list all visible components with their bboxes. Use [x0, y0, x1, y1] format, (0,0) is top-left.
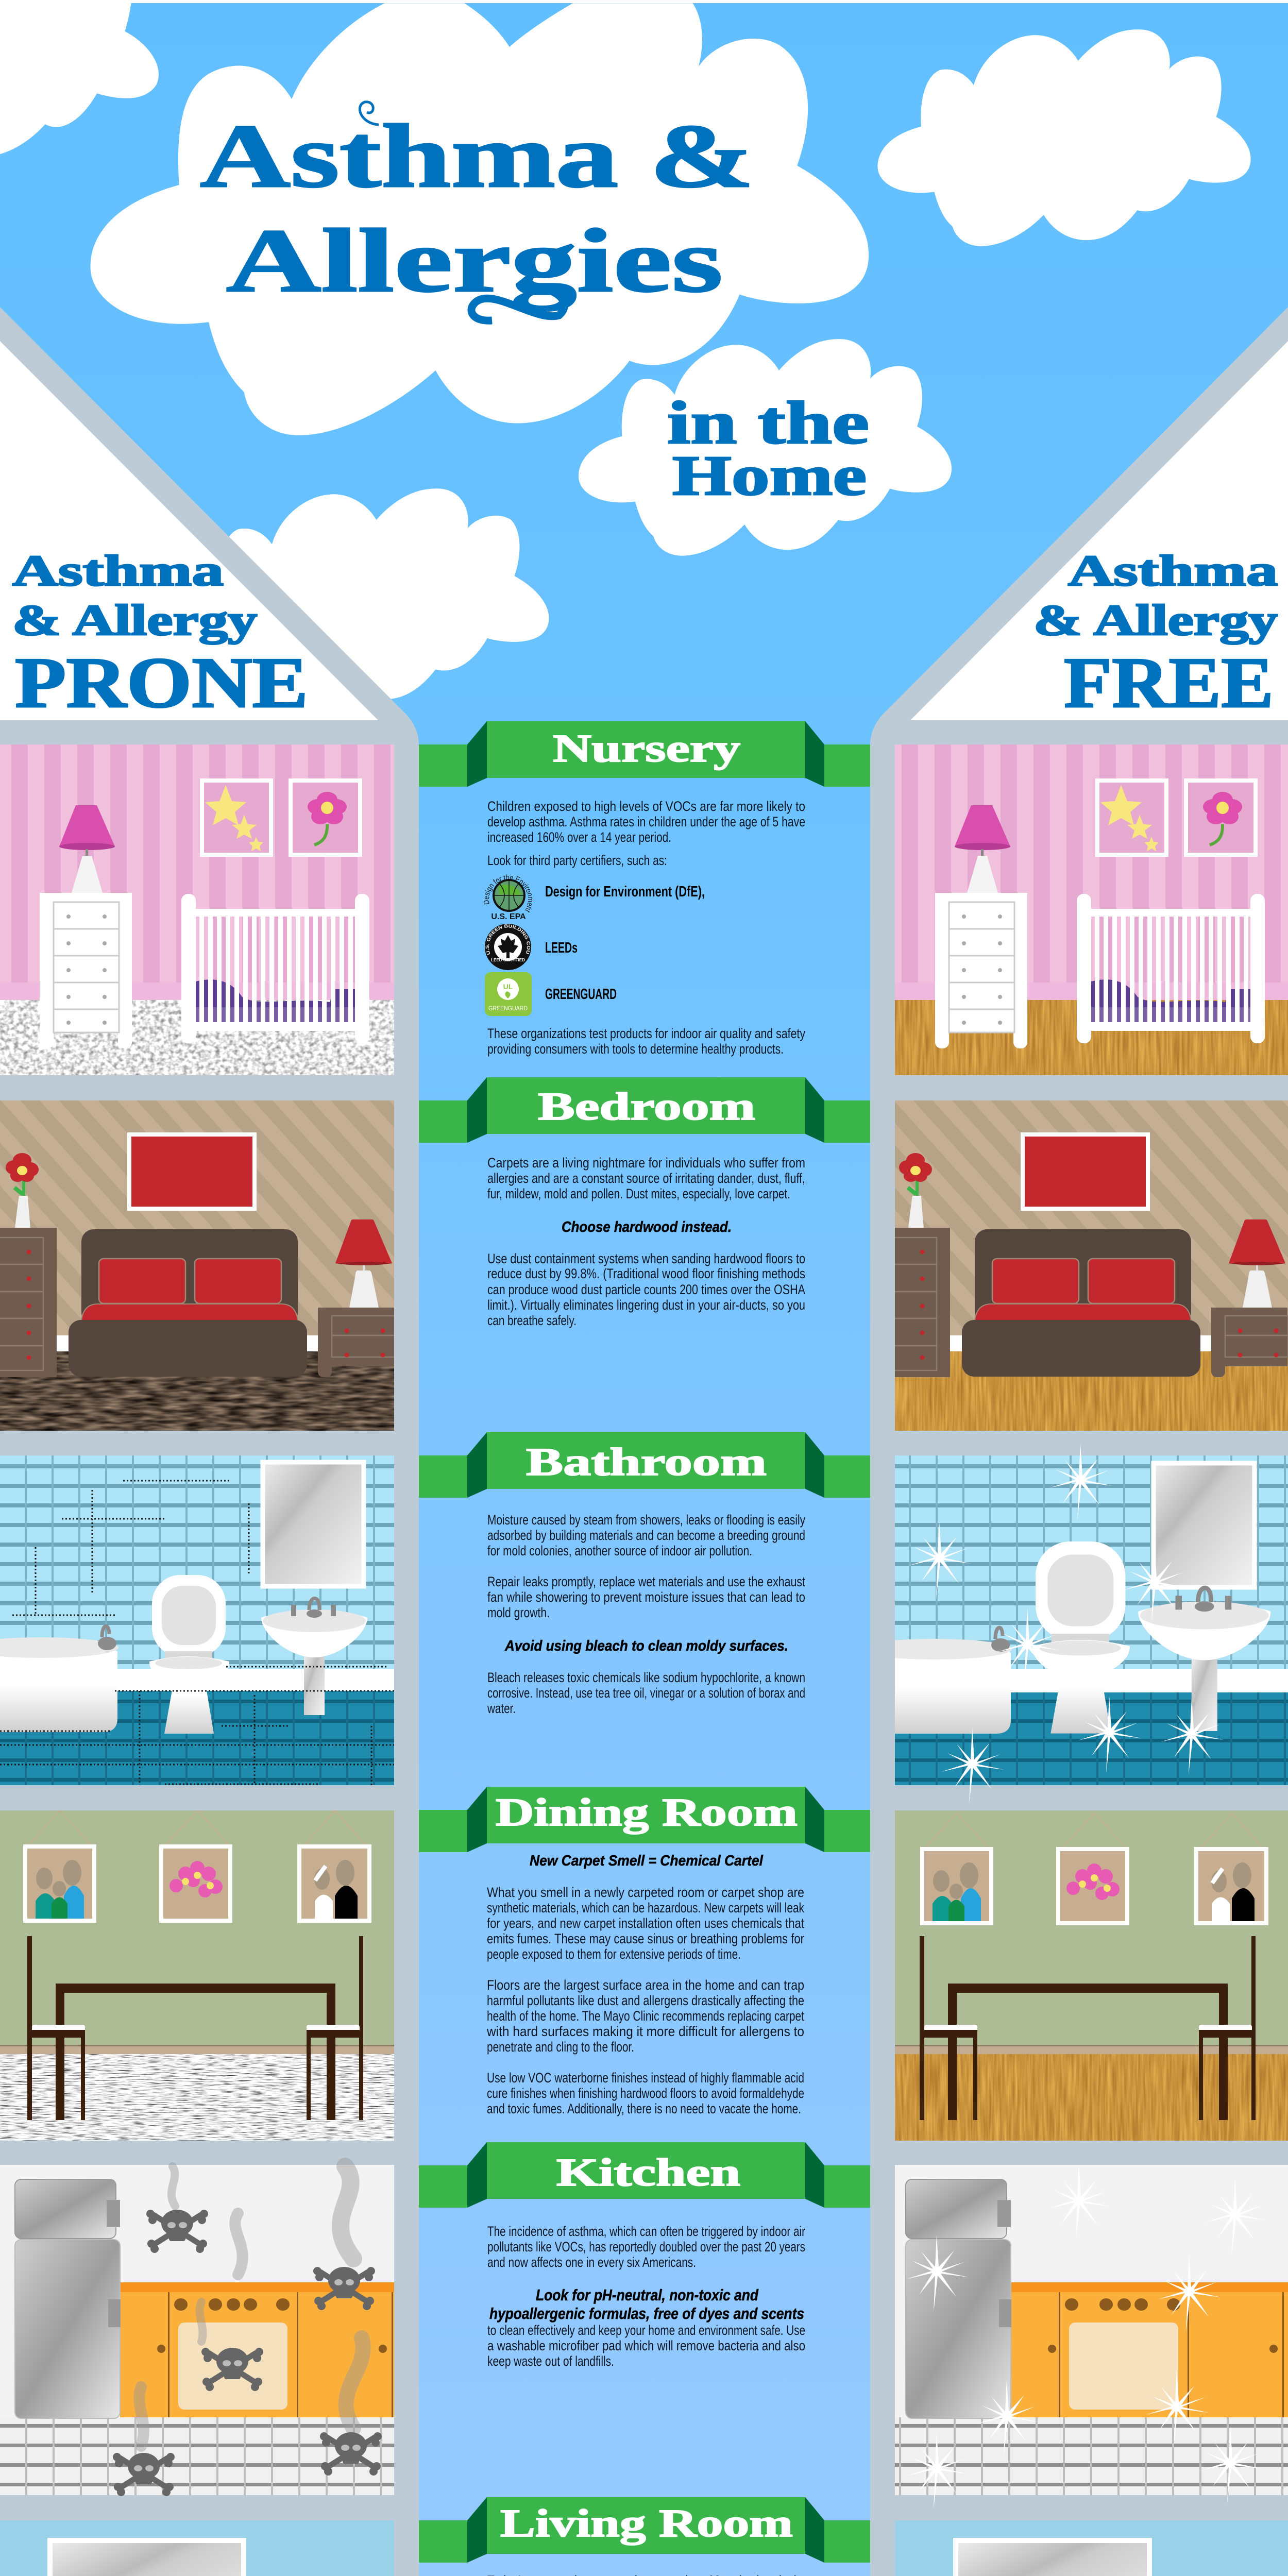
room: dining free: [895, 1810, 1288, 2141]
bathroom text: [487, 1512, 805, 1620]
label: asthma and allergy prone: [12, 547, 308, 723]
bleach text: corrosive. Instead, use tea tree oil, vinegar or a solution of borax and: [487, 1685, 805, 1701]
nursery intro text: [487, 799, 805, 868]
mold specks: [0, 1481, 394, 1785]
section: bedroom: [419, 1077, 870, 1328]
room: nursery free: [895, 744, 1288, 1075]
dining text: harmful pollutants like dust and allergens drastically affecting the: [487, 1993, 804, 2008]
bathroom text: adsorbed by building materials and can become a breeding ground: [487, 1528, 805, 1543]
logo: design for the environment: U.S. EPA: [491, 912, 526, 921]
dining text: Floors are the largest surface area in the home and can trap: [487, 1977, 804, 1993]
room: bathroom prone: [0, 1455, 394, 1785]
nursery closing text: providing consumers with tools to determine healthy products.: [487, 1041, 784, 1057]
room: living free: [895, 2520, 1288, 2576]
callout: new carpet smell: New Carpet Smell = Chemical Cartel: [530, 1853, 764, 1869]
kitchen closing text: a washable microfiber pad which will remove bacteria and also: [487, 2338, 805, 2353]
heading: bedroom: Bedroom: [538, 1085, 755, 1128]
bathroom text: fan while showering to prevent moisture issues that can lead to: [487, 1589, 805, 1605]
room: kitchen prone: [0, 2165, 429, 2496]
house walls and roof left: [0, 307, 419, 2576]
section: dining room: [419, 1787, 870, 2116]
bleach text: [487, 1670, 805, 1716]
section: nursery: [419, 721, 870, 1057]
logo: greenguard: UL: [503, 982, 513, 991]
room: dining prone: [0, 1810, 394, 2141]
callout: look for ph-neutral: Look for pH-neutral, non-toxic and: [536, 2286, 759, 2304]
dining text: Use low VOC waterborne finishes instead of highly flammable acid: [487, 2070, 804, 2086]
heading: kitchen: Kitchen: [556, 2151, 740, 2194]
callout: choose hardwood: Choose hardwood instead.: [562, 1219, 732, 1235]
logo: leed: LEED CERTIFIED: [491, 958, 525, 962]
kitchen text: The incidence of asthma, which can often be triggered by indoor air: [487, 2224, 805, 2239]
nursery closing text: [487, 1026, 805, 1057]
room: kitchen free: [895, 2164, 1288, 2509]
section: kitchen: [419, 2142, 870, 2369]
title: in the: [667, 389, 869, 456]
dining text: cure finishes when finishing hardwood floors to avoid formaldehyde: [487, 2086, 804, 2101]
bedroom dust text: can breathe safely.: [487, 1313, 577, 1328]
bedroom text: Carpets are a living nightmare for individuals who suffer from: [487, 1155, 805, 1171]
room: bedroom free: [888, 1100, 1288, 1431]
logo: leed: U.S. GREEN BUILDING COUNCIL: [485, 924, 531, 955]
title: Home: [672, 444, 867, 507]
label: asthma and allergy free: FREE: [1064, 643, 1274, 723]
label: asthma and allergy prone: Asthma: [12, 547, 224, 595]
label: asthma and allergy prone: & Allergy: [12, 596, 257, 645]
bathroom text: mold growth.: [487, 1605, 550, 1620]
room: bedroom prone: [0, 1100, 395, 1431]
label: asthma and allergy free: [1033, 547, 1278, 723]
heading: dining room: Dining Room: [496, 1791, 798, 1834]
kitchen text: pollutants like VOCs, has reportedly doubled over the past 20 years: [487, 2239, 805, 2255]
kitchen closing text: [487, 2323, 805, 2369]
nursery closing text: These organizations test products for indoor air quality and safety: [487, 1026, 805, 1041]
attic left: [0, 341, 378, 720]
bedroom text: [487, 1155, 805, 1201]
callout: look for ph-neutral: [489, 2286, 804, 2323]
bathroom text: for mold colonies, another source of indoor air pollution.: [487, 1543, 752, 1558]
bedroom dust text: can produce wood dust particle counts 200 times over the OSHA: [487, 1282, 805, 1297]
nursery intro text: Look for third party certifiers, such as:: [487, 853, 667, 868]
kitchen closing text: keep waste out of landfills.: [487, 2353, 614, 2369]
label: asthma and allergy free: & Allergy: [1033, 596, 1278, 645]
logo: greenguard: GREENGUARD: [488, 1005, 528, 1012]
dining text: people exposed to them for extensive periods of time.: [487, 1946, 741, 1962]
bathroom text: Repair leaks promptly, replace wet materials and use the exhaust: [487, 1574, 805, 1589]
toxic smoke: [139, 2166, 363, 2446]
callout: look for ph-neutral: hypoallergenic formulas, free of dyes and scents: [489, 2304, 804, 2323]
title: Allergies: [226, 211, 723, 311]
skulls: [113, 2210, 382, 2496]
section: living room: [419, 2497, 870, 2576]
sparkles: [908, 1444, 1224, 1805]
certifier names: GREENGUARD: [545, 986, 617, 1003]
bedroom dust text: [487, 1251, 805, 1328]
kitchen sparkles: [906, 2164, 1267, 2509]
label: asthma and allergy free: Asthma: [1068, 547, 1278, 595]
kitchen text: [487, 2224, 805, 2270]
dining text: for years, and new carpet installation often uses chemicals that: [487, 1916, 804, 1931]
dining text: penetrate and cling to the floor.: [487, 2039, 634, 2055]
certifier names: [545, 884, 705, 1003]
room: nursery prone: [0, 744, 394, 1075]
bleach text: water.: [487, 1701, 516, 1716]
bedroom dust text: limit.). Virtually eliminates lingering dust in your air-ducts, so you: [487, 1297, 805, 1313]
logo: leed: [485, 924, 531, 970]
attic right: [910, 341, 1288, 720]
logo: greenguard: [485, 972, 532, 1016]
title: Asthma &: [200, 106, 754, 207]
dining text: health of the home. The Mayo Clinic recommends replacing carpet: [487, 2008, 804, 2024]
label: asthma and allergy prone: PRONE: [15, 643, 308, 723]
kitchen text: and now affects one in every six Americans.: [487, 2255, 696, 2270]
bedroom text: fur, mildew, mold and pollen. Dust mites, especially, love carpet.: [487, 1186, 790, 1201]
dining text: with hard surfaces making it more difficult for allergens to: [486, 2024, 804, 2039]
heading: nursery: Nursery: [553, 727, 740, 770]
callout: avoid bleach: Avoid using bleach to clean moldy surfaces.: [504, 1638, 788, 1654]
dining text: [486, 1885, 804, 2116]
section: bathroom: [419, 1432, 870, 1716]
heading: bathroom: Bathroom: [526, 1440, 767, 1484]
certifier names: Design for Environment (DfE),: [545, 884, 705, 900]
nursery intro text: Children exposed to high levels of VOCs are far more likely to: [487, 799, 805, 814]
room: bathroom free: [857, 1444, 1288, 1805]
dining text: emits fumes. These may cause sinus or breathing problems for: [487, 1931, 804, 1946]
room: living prone: [0, 2520, 394, 2576]
title: [200, 102, 869, 507]
dining text: What you smell in a newly carpeted room or carpet shop are: [487, 1885, 804, 1900]
bedroom text: allergies and are a constant source of irritating dander, dust, fluff,: [487, 1171, 805, 1186]
dining text: synthetic materials, which can be hazardous. New carpets will leak: [487, 1900, 804, 1916]
bathroom text: Moisture caused by steam from showers, leaks or flooding is easily: [487, 1512, 805, 1528]
house walls and roof right: [870, 307, 1288, 2576]
nursery intro text: develop asthma. Asthma rates in children under the age of 5 have: [487, 814, 805, 829]
bedroom dust text: Use dust containment systems when sanding hardwood floors to: [487, 1251, 805, 1266]
clouds: [0, 0, 1251, 705]
dining text: and toxic fumes. Additionally, there is no need to vacate the home.: [487, 2101, 801, 2116]
bedroom dust text: reduce dust by 99.8%. (Traditional wood floor finishing methods: [487, 1266, 805, 1281]
logo: design for the environment: Design for the Environment: [484, 874, 532, 912]
certifier names: LEEDs: [545, 940, 578, 956]
kitchen closing text: to clean effectively and keep your home and environment safe. Use: [487, 2323, 805, 2338]
bleach text: Bleach releases toxic chemicals like sodium hypochlorite, a known: [487, 1670, 805, 1685]
heading: living room: Living Room: [500, 2502, 793, 2545]
nursery intro text: increased 160% over a 14 year period.: [487, 829, 671, 845]
